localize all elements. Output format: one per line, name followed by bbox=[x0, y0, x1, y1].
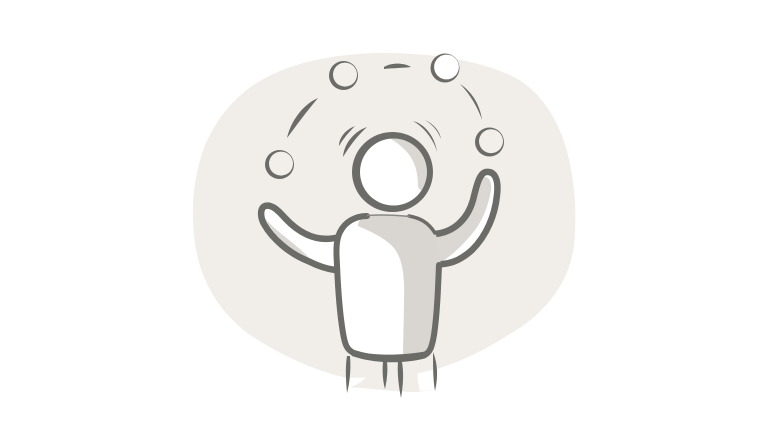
head shading bbox=[385, 135, 431, 191]
torso outline bbox=[336, 216, 439, 359]
ball left bbox=[265, 150, 294, 179]
leg highlights bbox=[350, 350, 440, 392]
left arm bbox=[260, 205, 335, 272]
juggling arc strokes bbox=[287, 64, 482, 138]
juggling balls bbox=[265, 54, 504, 179]
torso shading bbox=[358, 215, 441, 357]
legs bbox=[346, 352, 437, 398]
ball top left bbox=[329, 61, 358, 90]
head bbox=[352, 132, 433, 212]
torso hem thickening bbox=[348, 349, 428, 362]
right arm bbox=[428, 170, 498, 265]
motion lines around head bbox=[339, 120, 441, 157]
torso bbox=[336, 215, 441, 362]
background blob bbox=[193, 53, 575, 378]
ball top right bbox=[430, 54, 460, 82]
ball right bbox=[475, 128, 504, 156]
